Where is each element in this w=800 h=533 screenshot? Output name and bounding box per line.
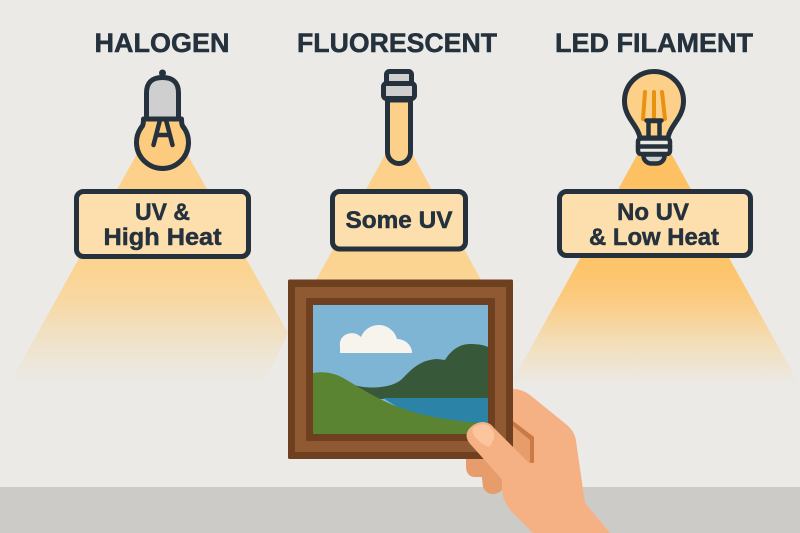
painting: sky xyxy=(313,305,488,434)
label: UV and high heat: High Heat xyxy=(104,224,222,251)
painting: distant hills xyxy=(352,344,488,399)
hand: palm crease behind frame xyxy=(513,421,534,463)
heading: LED filament: LED FILAMENT xyxy=(555,28,754,58)
icon: fluorescent tube xyxy=(384,72,414,164)
hand: thumbnail xyxy=(472,424,494,447)
hand: palm and wrist xyxy=(466,389,610,533)
label: some UV xyxy=(332,192,466,249)
icon: LED filament bulb xyxy=(624,72,684,164)
painting: foreground hill xyxy=(313,372,488,434)
hand: thumb xyxy=(466,422,530,484)
light beam: halogen xyxy=(11,150,288,381)
label: UV and high heat xyxy=(76,192,248,256)
painting: lake xyxy=(383,398,488,434)
label: UV and high heat: UV & xyxy=(135,199,190,226)
hand: fingers behind the frame xyxy=(466,450,503,494)
floor xyxy=(0,487,800,533)
label: no UV and low heat xyxy=(560,192,750,256)
label: no UV and low heat: & Low Heat xyxy=(589,224,719,251)
light beam: LED filament xyxy=(511,155,799,384)
heading: halogen: HALOGEN xyxy=(94,28,230,58)
icon: halogen bulb xyxy=(136,70,188,168)
framed landscape painting xyxy=(288,280,513,459)
label: no UV and low heat: No UV xyxy=(617,199,689,226)
label: some UV: Some UV xyxy=(346,207,452,234)
painting: cloud xyxy=(340,325,412,353)
light beam: fluorescent xyxy=(316,155,481,280)
heading: fluorescent: FLUORESCENT xyxy=(297,28,498,58)
